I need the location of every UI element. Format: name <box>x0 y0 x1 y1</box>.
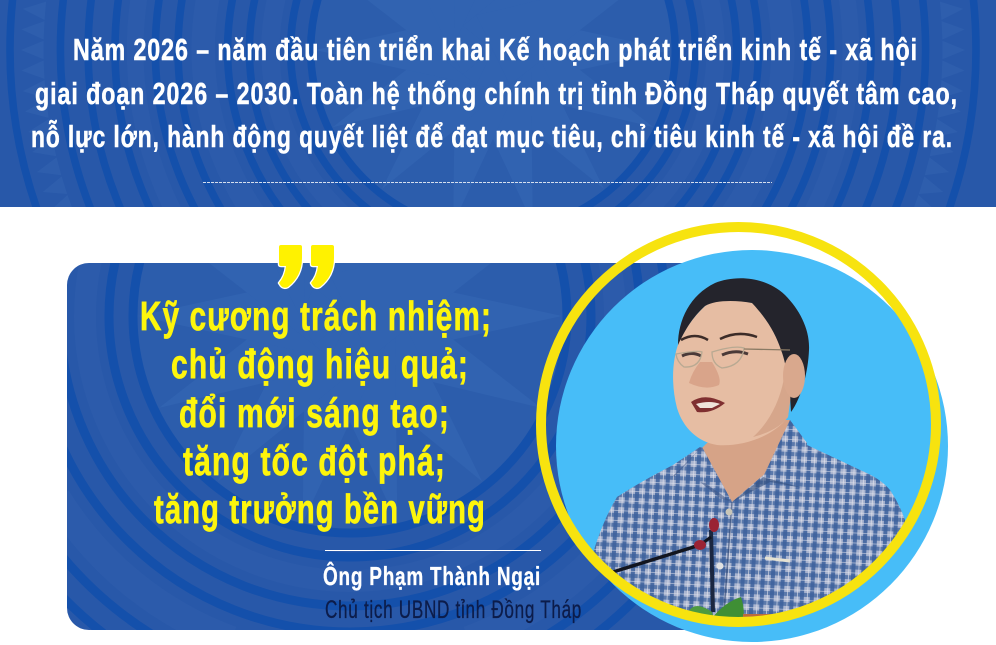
text: quote slogan <box>140 293 492 532</box>
portrait: speaker in circular frame <box>536 222 948 642</box>
icon: quotation mark <box>278 245 335 290</box>
photo: man speaking at microphone <box>594 278 905 617</box>
text: intro paragraph <box>31 32 958 154</box>
panel: header banner <box>0 0 996 207</box>
text: speaker attribution <box>323 550 582 624</box>
shape: yellow ring <box>541 227 936 622</box>
shape: light blue backing circle <box>556 250 948 642</box>
panel: quote card <box>67 263 690 630</box>
